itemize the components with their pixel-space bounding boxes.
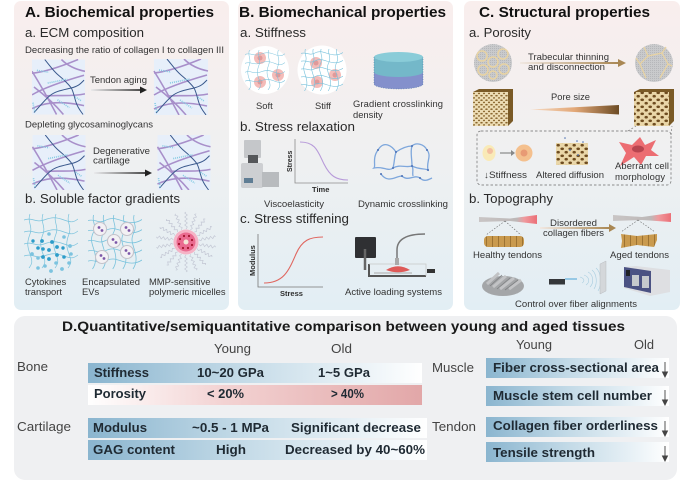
bar: tensile strength: Tensile strength	[493, 446, 595, 460]
arrow: degenerative cartilage: cartilage	[93, 154, 130, 166]
icon: active loading system	[355, 234, 435, 276]
label: gradient crosslinking density: Gradient crosslinking	[353, 98, 443, 109]
icon: dynamic crosslinking network	[374, 144, 432, 180]
column label: old right: Old	[634, 338, 654, 352]
arrow: degenerative cartilage	[93, 145, 152, 176]
heading: D: D.Quantitative/semiquantitative comparison between young and aged tissues	[62, 318, 625, 334]
label: altered diffusion: Altered diffusion	[536, 169, 604, 180]
icon: cytokines transport	[24, 214, 78, 273]
bar: collagen fiber orderliness	[486, 417, 669, 437]
icon: incubator instrument	[624, 266, 670, 296]
label: healthy tendons: Healthy tendons	[473, 249, 542, 260]
column label: young right: Young	[516, 338, 552, 352]
bar: bone porosity: > 40%	[331, 387, 364, 401]
column label: old left: Old	[331, 342, 352, 356]
bar: bone porosity	[88, 385, 422, 405]
callout: effects of porosity	[477, 126, 672, 185]
bar: cartilage modulus	[88, 418, 427, 438]
row label: cartilage: Cartilage	[17, 420, 71, 434]
bar: tensile strength	[486, 442, 669, 462]
subheading: topography: b. Topography	[469, 191, 553, 206]
label: soft: Soft	[256, 100, 273, 111]
label: dynamic crosslinking: Dynamic crosslinking	[358, 198, 448, 209]
icon: soft hydrogel	[241, 46, 289, 94]
subheading: porosity: a. Porosity	[469, 25, 531, 40]
column label: young left: Young	[214, 342, 251, 356]
bar: cartilage GAG content: High	[216, 443, 246, 457]
bar: fiber cross-sectional area: Fiber cross-sectional area	[493, 361, 660, 375]
chart: modulus vs stress	[248, 234, 323, 298]
icon: aged matrix 2	[157, 135, 211, 190]
bar: cartilage modulus: ~0.5 - 1 MPa	[192, 421, 270, 435]
chart: viscoelasticity stress vs time	[287, 139, 348, 194]
icon: dense trabecular bone	[474, 44, 512, 82]
panel: A biochemical properties	[14, 1, 229, 310]
bar: muscle stem cell number: Muscle stem cell number	[493, 389, 652, 403]
text: collagen ratio: Decreasing the ratio of collagen I to collagen III	[25, 44, 224, 55]
row label: bone: Bone	[17, 360, 48, 374]
bar: bone porosity: Porosity	[94, 387, 146, 401]
heading: B: B. Biomechanical properties	[239, 4, 446, 21]
arrow: trabecular thinning: Trabecular thinning	[528, 51, 609, 62]
label: MMP-sensitive micelles: MMP-sensitive	[149, 276, 210, 287]
bar: bone stiffness: 10~20 GPa	[197, 366, 265, 380]
subheading: stress relaxation: b. Stress relaxation	[240, 119, 355, 134]
panel: D quantitative comparison	[14, 316, 677, 480]
icon: encapsulated EVs	[88, 215, 142, 269]
subheading: ECM composition: a. ECM composition	[25, 25, 144, 40]
icon: coarse porous block	[634, 89, 674, 126]
bar: bone stiffness	[88, 363, 422, 383]
chart: viscoelasticity stress vs time: Stress	[287, 150, 294, 172]
bar: cartilage GAG content	[88, 440, 427, 460]
label: cytokines transport: Cytokines	[25, 276, 66, 287]
label: encapsulated EVs: Encapsulated	[82, 276, 140, 287]
arrow: disordered collagen fibers	[540, 217, 616, 238]
bar: bone stiffness: 1~5 GPa	[318, 366, 371, 380]
label: aged tendons: Aged tendons	[610, 249, 669, 260]
bar: cartilage modulus: Significant decrease	[291, 421, 421, 435]
chart: modulus vs stress: Stress	[280, 289, 303, 298]
icon: young matrix 1	[32, 60, 85, 114]
label: aberrant cell morphology: morphology	[615, 171, 665, 182]
icon: altered diffusion	[556, 137, 588, 165]
arrow: tendon aging: Tendon aging	[90, 74, 147, 85]
icon: healthy tendon	[479, 215, 537, 247]
icon: mechanical tester	[241, 140, 279, 188]
chart: modulus vs stress: Modulus	[248, 245, 257, 276]
icon: grooved disk	[482, 273, 524, 296]
bar: cartilage modulus: Modulus	[93, 421, 147, 435]
icon: aged tendon	[613, 213, 671, 248]
label: pore size: Pore size	[551, 91, 590, 102]
chart: viscoelasticity stress vs time: Time	[312, 185, 329, 194]
bar: collagen fiber orderliness: Collagen fiber orderliness	[493, 419, 658, 433]
label: control over fiber alignments: Control over fiber alignments	[515, 298, 637, 309]
icon: aged trabecular bone	[635, 44, 673, 82]
icon: aged matrix 1	[154, 59, 208, 115]
subheading: soluble factor gradients: b. Soluble factor gradients	[25, 191, 180, 206]
label: cytokines transport: transport	[25, 286, 62, 297]
label: MMP-sensitive micelles: polymeric micelles	[149, 286, 226, 297]
arrow: trabecular thinning: and disconnection	[528, 61, 605, 72]
icon: gradient crosslinking cylinder	[374, 52, 423, 89]
arrow: disordered collagen fibers: collagen fibers	[543, 227, 604, 238]
label: aberrant cell morphology: Aberrant cell	[615, 160, 669, 171]
arrow: degenerative cartilage: Degenerative	[93, 145, 150, 156]
bar: fiber cross-sectional area	[486, 358, 669, 378]
bar: bone porosity: < 20%	[207, 387, 244, 401]
label: stiff: Stiff	[315, 100, 331, 111]
icon: electrospinning setup	[549, 261, 606, 294]
label: active loading systems: Active loading systems	[345, 286, 442, 297]
bar: muscle stem cell number	[486, 386, 669, 406]
icon: aberrant cell	[619, 137, 659, 166]
arrow: trabecular thinning	[520, 51, 626, 72]
panel: C structural properties	[464, 1, 680, 310]
bar: cartilage GAG content: Decreased by 40~60%	[285, 443, 425, 457]
icon: young matrix 2	[32, 135, 86, 190]
bar: bone stiffness: Stiffness	[94, 366, 149, 380]
wedge: pore size gradient	[530, 105, 619, 114]
label: encapsulated EVs: EVs	[82, 286, 100, 297]
text: glycosaminoglycans: Depleting glycosaminoglycans	[25, 118, 153, 130]
bar: cartilage GAG content: GAG content	[93, 443, 176, 457]
icon: cell stiffness change	[482, 144, 532, 162]
heading: C: C. Structural properties	[479, 4, 650, 21]
icon: dense porous block	[473, 89, 513, 126]
label: stiffness decrease: ↓Stiffness	[484, 169, 527, 180]
panel: B biomechanical properties	[238, 1, 453, 310]
heading: A: A. Biochemical properties	[25, 4, 214, 21]
icon: stiff hydrogel	[298, 46, 346, 94]
label: gradient crosslinking density: density	[353, 109, 383, 120]
icon: polymeric micelle	[156, 212, 216, 272]
subheading: stress stiffening: c. Stress stiffening	[240, 211, 349, 226]
arrow: disordered collagen fibers: Disordered	[550, 217, 597, 228]
arrow: tendon aging	[90, 74, 147, 94]
subheading: stiffness: a. Stiffness	[240, 25, 306, 40]
label: viscoelasticity: Viscoelasticity	[264, 198, 324, 209]
row label: tendon: Tendon	[432, 420, 476, 434]
row label: muscle: Muscle	[432, 361, 474, 375]
